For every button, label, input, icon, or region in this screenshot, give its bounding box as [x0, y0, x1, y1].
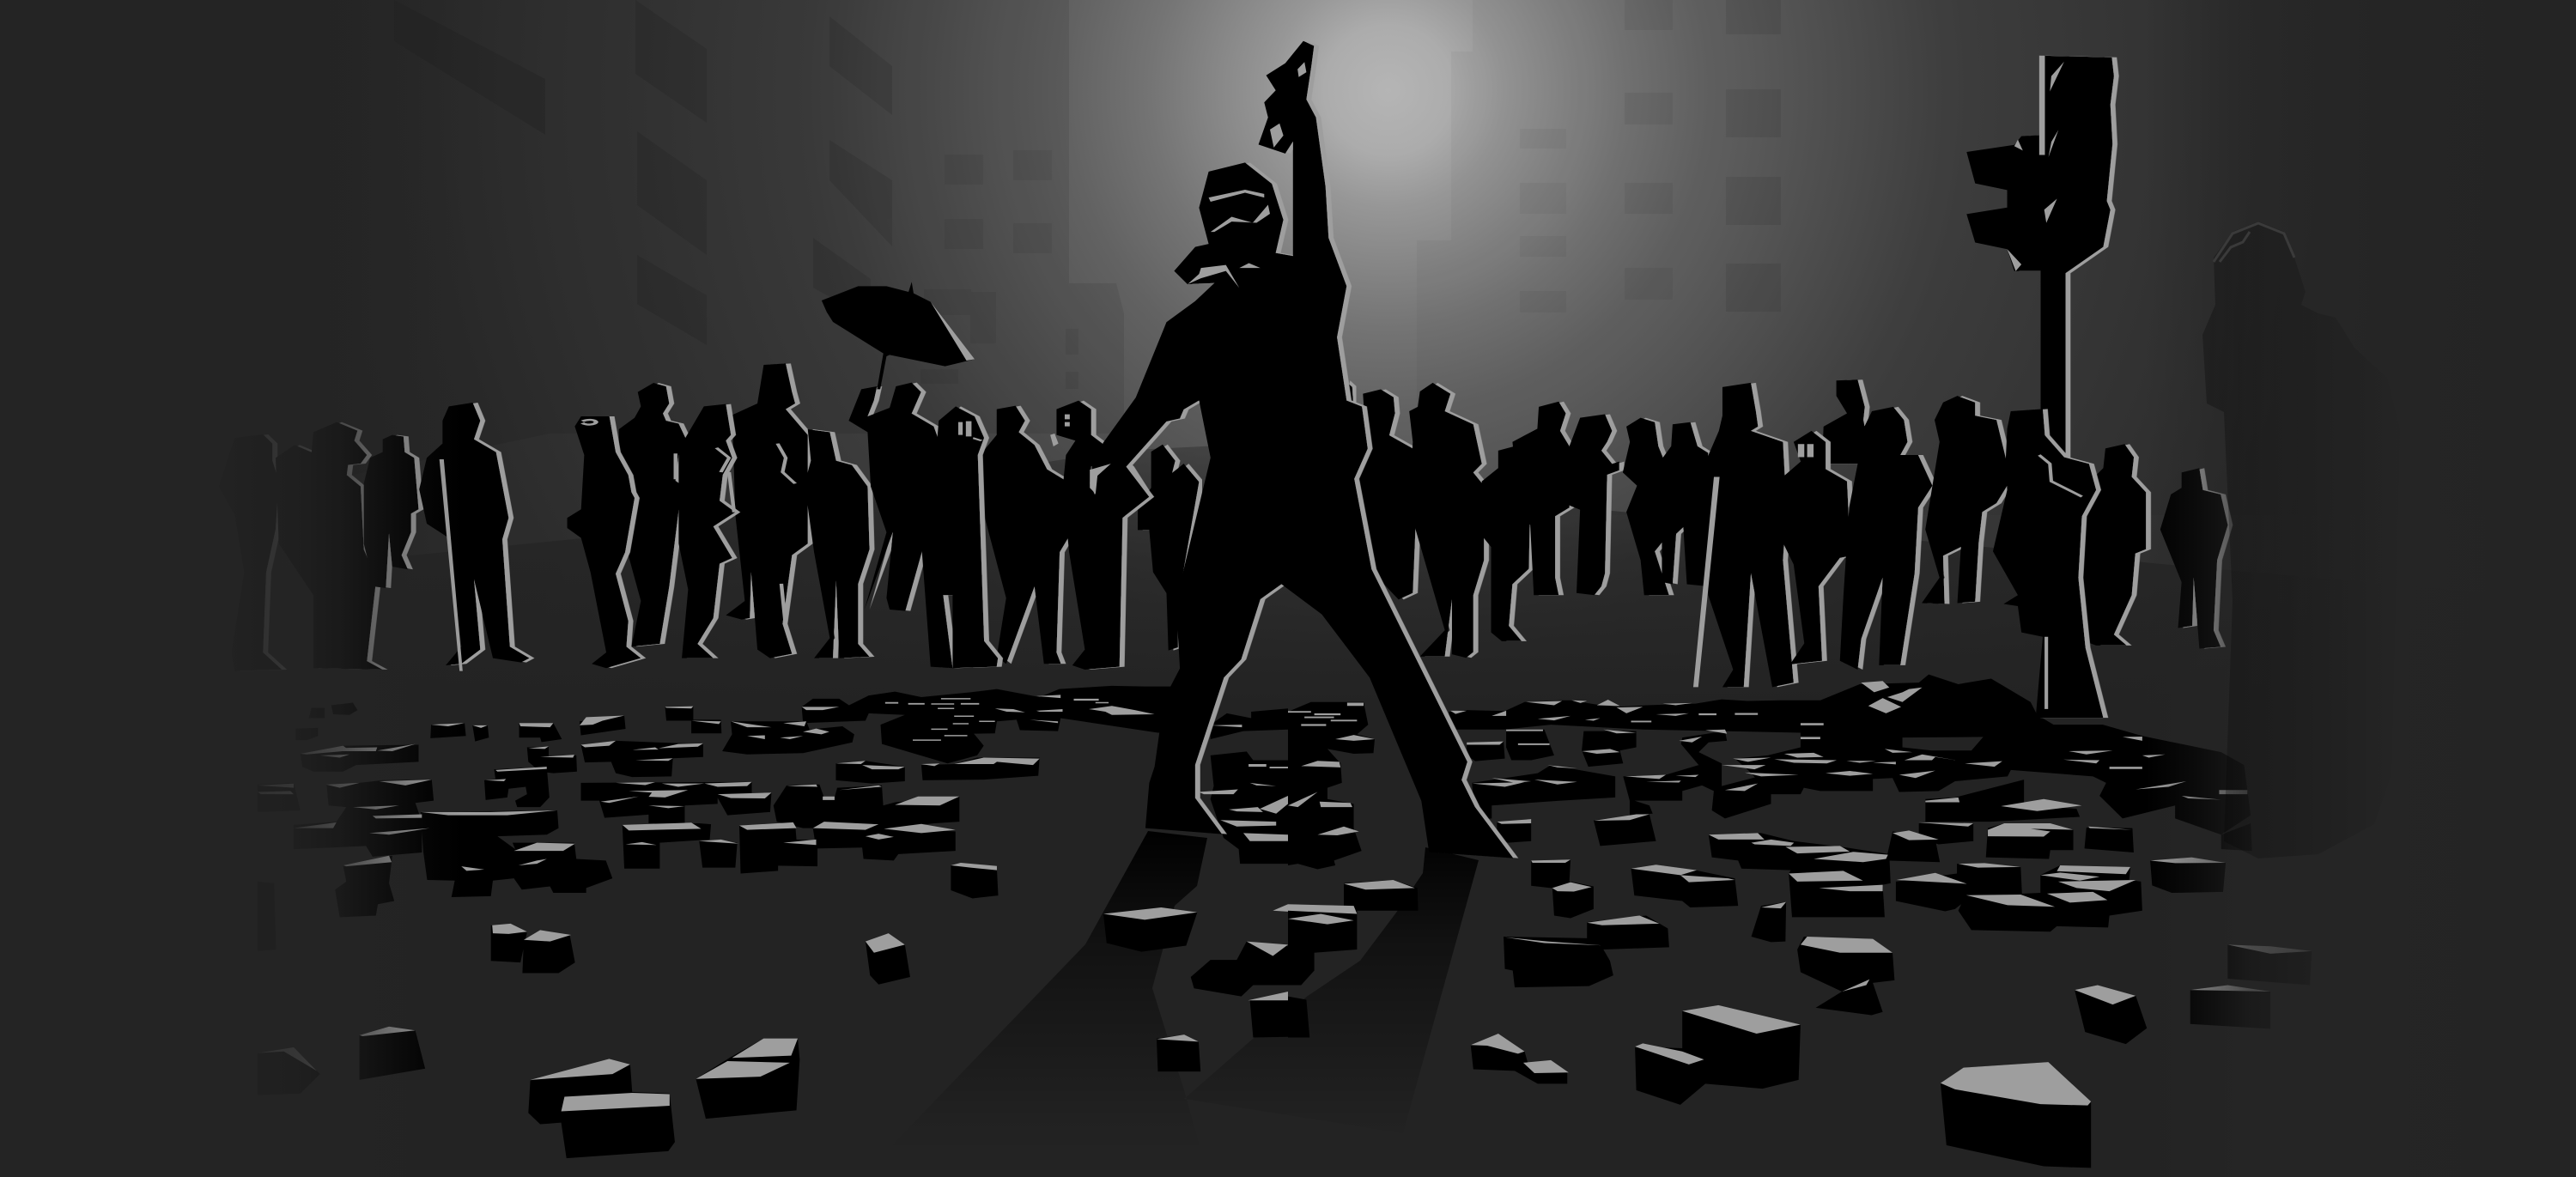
- crowd: foreground man at right: [1993, 409, 2103, 718]
- hand details and gas mask highlights: [1090, 62, 1306, 494]
- crowd: figure behind main leg: [1138, 445, 1199, 651]
- traffic light: [1966, 56, 2114, 482]
- umbrella: [822, 282, 975, 389]
- buildings: darker facades and windows: [0, 0, 2576, 549]
- main figure: protester with raised fist: [1090, 41, 1513, 858]
- ghost figure at far right: [2202, 221, 2400, 858]
- crowd: right group: [1338, 379, 2228, 687]
- ground plane: [0, 442, 2576, 1177]
- shadows cast by main figure: [889, 831, 1479, 1155]
- crowd: left group: [219, 282, 1149, 671]
- rubble: left half: [258, 686, 1288, 1158]
- rubble: right half: [1288, 675, 2312, 1168]
